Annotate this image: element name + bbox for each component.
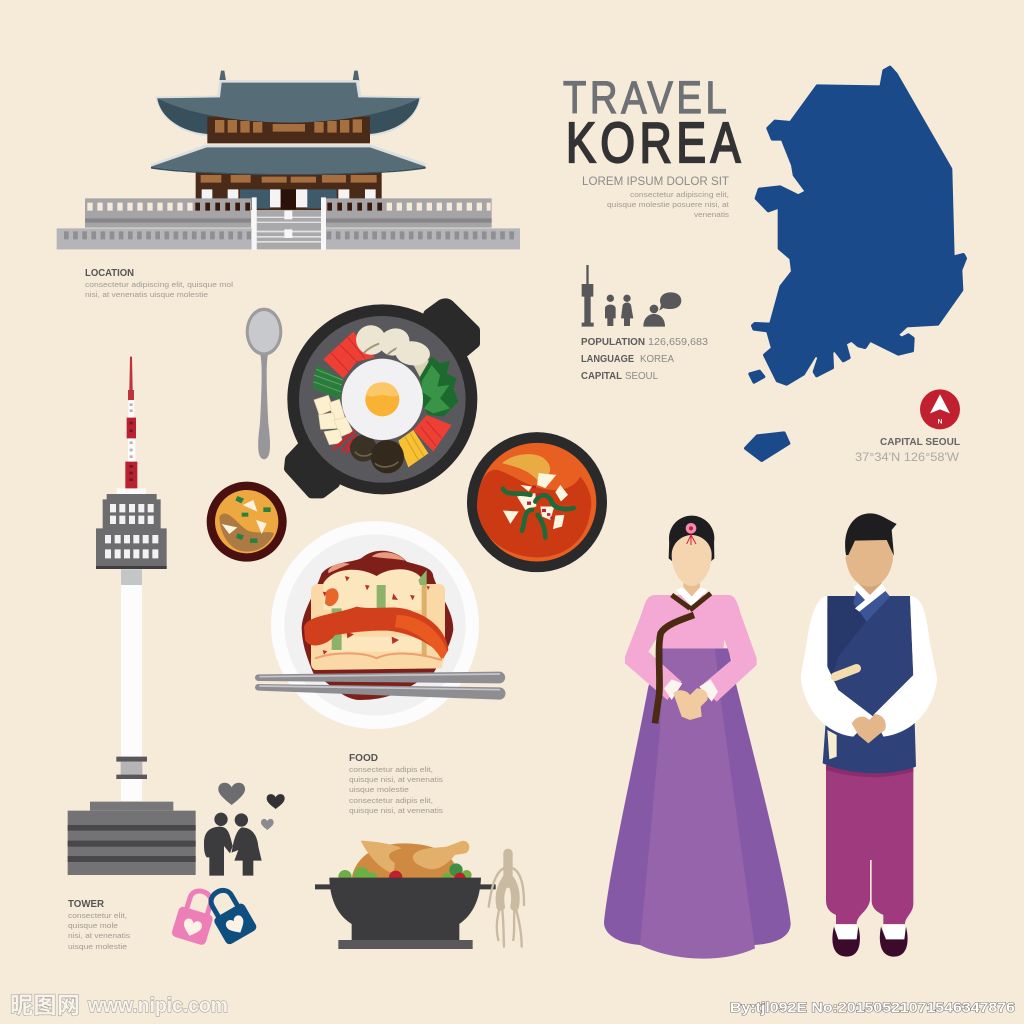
green onions xyxy=(313,365,343,400)
icon: blue padlock xyxy=(202,883,258,946)
text: subtitle block: consectetur adipiscing elit, xyxy=(630,190,729,199)
red pepper stripe xyxy=(304,607,448,658)
text: facts xyxy=(581,336,708,382)
red carrots xyxy=(323,332,375,378)
icon: couple silhouette xyxy=(204,813,262,876)
samgyetang pot with chicken xyxy=(315,841,524,949)
text: capital coordinates: CAPITAL SEOUL xyxy=(880,436,961,448)
icon: pink padlock xyxy=(171,886,220,946)
neck and collar xyxy=(853,580,887,612)
text: subtitle block: quisque molestie posuere nisi, at xyxy=(607,200,730,209)
mainland xyxy=(753,67,965,384)
icon: tower xyxy=(582,265,594,327)
icon: compass: N xyxy=(938,419,943,426)
kimchi stew bowl xyxy=(467,432,607,572)
upper roof face xyxy=(157,83,419,123)
text: subtitle block: venenatis xyxy=(694,210,729,219)
text: food xyxy=(349,753,443,815)
chopsticks xyxy=(255,672,505,700)
socks and shoes xyxy=(832,925,908,957)
title xyxy=(563,72,745,174)
red flakes xyxy=(323,576,430,655)
cuffs xyxy=(664,679,718,702)
text: tower xyxy=(68,899,130,951)
text: food: uisque molestie xyxy=(349,785,409,794)
skirt xyxy=(604,648,791,959)
head xyxy=(669,516,714,586)
tofu pieces xyxy=(503,473,568,529)
green leaves xyxy=(420,357,458,417)
text: food: quisque nisi, at venenatis xyxy=(349,806,443,815)
small island xyxy=(750,371,764,382)
icon: compass xyxy=(920,389,960,429)
title: TRAVEL xyxy=(563,72,730,123)
text: tower: nisi, at venenatis xyxy=(68,931,130,940)
head xyxy=(845,513,897,587)
text: facts: KOREA xyxy=(640,353,674,365)
balustrades and terrace xyxy=(57,198,520,249)
tie ribbon xyxy=(827,668,857,759)
trousers xyxy=(826,765,913,924)
upper palace roof xyxy=(155,71,421,136)
hair ornament xyxy=(686,523,696,545)
bibimbap pot xyxy=(289,303,475,493)
tofu pieces xyxy=(222,500,267,534)
man in hanbok xyxy=(801,513,937,957)
text: food: FOOD xyxy=(349,753,378,764)
egg yolk swirl xyxy=(502,454,550,481)
text: facts: LANGUAGE xyxy=(581,353,634,365)
miso soup bowl xyxy=(207,482,287,562)
orange chili patch xyxy=(325,588,339,606)
text: facts: 126,659,683 xyxy=(648,336,708,348)
couple, hearts and love locks xyxy=(171,783,285,946)
pot inner xyxy=(299,316,466,483)
icon: hearts xyxy=(218,783,285,830)
text: location: LOCATION xyxy=(85,268,134,279)
text: facts: SEOUL xyxy=(625,370,658,382)
text: tower: uisque molestie xyxy=(68,942,127,951)
text: food: quisque nisi, at venenatis xyxy=(349,775,443,784)
pink jacket xyxy=(625,595,757,702)
text: location: consectetur adipiscing elit, quisque mol xyxy=(85,280,233,289)
icons: facts row xyxy=(582,265,681,327)
icon: spoon xyxy=(246,308,282,459)
text: food: consectetur adipis elit, xyxy=(349,796,433,805)
collar and ribbon xyxy=(655,587,711,723)
garnish xyxy=(338,863,472,884)
panel: palace illustration xyxy=(57,71,520,250)
title: KOREA xyxy=(566,111,745,174)
neck xyxy=(683,578,700,606)
tofu cubes xyxy=(314,395,353,445)
white sleeves xyxy=(801,596,937,737)
lower wooden storey xyxy=(196,172,382,210)
text: food: consectetur adipis elit, xyxy=(349,765,433,774)
central staircase xyxy=(252,197,326,250)
tower base xyxy=(68,757,196,875)
hands xyxy=(673,688,708,720)
chili flakes xyxy=(527,485,553,519)
kimchi plate xyxy=(255,521,505,729)
N Seoul Tower xyxy=(68,357,196,875)
pot xyxy=(315,878,496,949)
upper wooden storey xyxy=(207,117,370,143)
icon: ginseng root xyxy=(489,853,524,947)
text: location: nisi, at venenatis uisque molestie xyxy=(85,290,208,299)
icon: man and woman xyxy=(605,295,633,326)
Jeju island xyxy=(746,433,789,460)
text: capital coordinates xyxy=(855,436,961,464)
fried egg xyxy=(342,359,423,440)
text: location xyxy=(85,268,233,299)
hands xyxy=(852,714,886,743)
woman in hanbok xyxy=(604,516,791,959)
watermark: site logo xyxy=(10,992,228,1018)
dark mushrooms xyxy=(350,435,404,473)
text: facts: CAPITAL xyxy=(581,370,623,382)
cabbage layers xyxy=(311,569,445,670)
watermark: site logo: www.nipic.com xyxy=(87,995,228,1017)
tower top: antenna and observation deck xyxy=(96,357,167,585)
watermark: site logo: 昵图网 xyxy=(10,992,80,1018)
text: tower: TOWER xyxy=(68,899,105,910)
text: subtitle block: LOREM IPSUM DOLOR SIT xyxy=(582,176,729,188)
navy vest xyxy=(823,588,916,773)
text: capital coordinates: 37°34'N 126°58'W xyxy=(855,450,960,464)
text: facts: POPULATION xyxy=(581,336,645,348)
kimchi sauce base xyxy=(302,551,453,700)
icon: speaker and speech bubble xyxy=(643,292,681,327)
yellow strips xyxy=(398,430,428,467)
mushrooms xyxy=(351,320,431,377)
roast chicken xyxy=(352,841,469,878)
scallions xyxy=(235,496,271,543)
red pepper strips xyxy=(333,431,357,453)
text: tower: consectetur elit, xyxy=(68,911,127,920)
text: tower: quisque mole xyxy=(68,921,118,930)
map of South Korea xyxy=(746,67,965,460)
watermark: author and number: By:tjl092E No:20150521071546347876 xyxy=(730,999,1015,1015)
red strips xyxy=(413,415,452,452)
text: subtitle block xyxy=(582,176,730,219)
lower palace roof xyxy=(151,145,426,175)
tower shaft xyxy=(121,585,142,801)
pot body and handles xyxy=(289,303,475,493)
scallion strands xyxy=(503,489,574,537)
plate xyxy=(271,521,479,729)
